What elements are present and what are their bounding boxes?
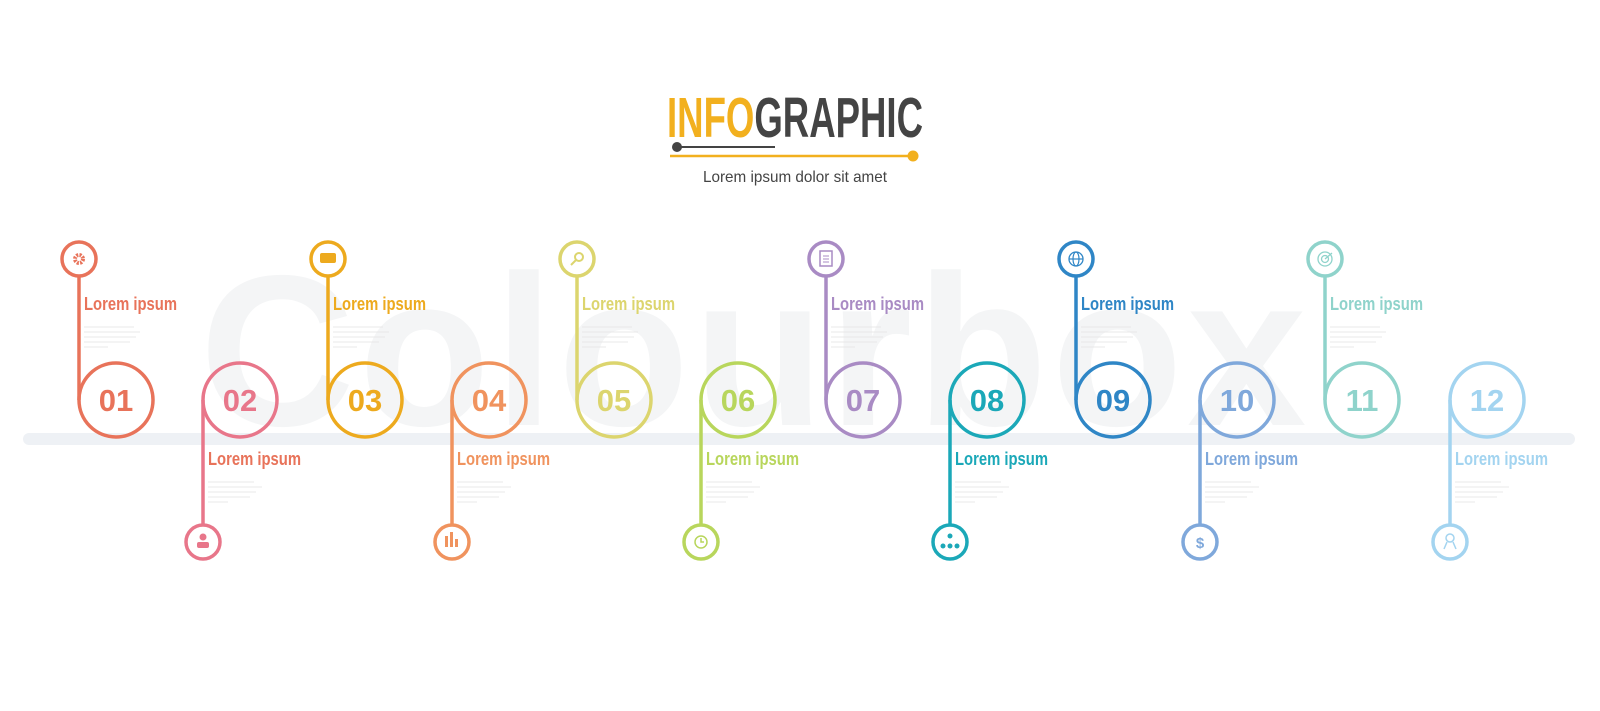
step 12 — [1433, 363, 1548, 559]
step 08: Lorem ipsum — [955, 449, 1048, 469]
title: INFOGRAPHIC — [667, 86, 923, 150]
step 02: Lorem ipsum — [208, 449, 301, 469]
step 05: Lorem ipsum — [582, 294, 675, 314]
timeline bar — [23, 433, 1575, 445]
step 08 — [933, 363, 1048, 559]
step 05 — [560, 242, 675, 437]
step 03: 03 — [348, 383, 382, 418]
step 10 — [1183, 363, 1298, 559]
step 06: Lorem ipsum — [706, 449, 799, 469]
step 09: 09 — [1096, 383, 1130, 418]
step 10: Lorem ipsum — [1205, 449, 1298, 469]
step 01: Lorem ipsum — [84, 294, 177, 314]
step 01: 01 — [99, 383, 133, 418]
step 02: 02 — [223, 383, 257, 418]
step 07: Lorem ipsum — [831, 294, 924, 314]
step 08: 08 — [970, 383, 1004, 418]
step 10: 10 — [1220, 383, 1254, 418]
step 11 — [1308, 242, 1423, 437]
subtitle: Lorem ipsum dolor sit amet — [703, 169, 888, 186]
step 11: Lorem ipsum — [1330, 294, 1423, 314]
step 03 — [311, 242, 426, 437]
watermark: Colourbox — [200, 230, 1310, 471]
step 12: Lorem ipsum — [1455, 449, 1548, 469]
step 03: Lorem ipsum — [333, 294, 426, 314]
step 10: $ — [1196, 535, 1205, 552]
step 04: 04 — [472, 383, 507, 418]
step 06 — [684, 363, 799, 559]
title — [667, 86, 923, 162]
step 07: 07 — [846, 383, 880, 418]
step 02 — [186, 363, 301, 559]
step 12: 12 — [1470, 383, 1504, 418]
step 04 — [435, 363, 550, 559]
step 04: Lorem ipsum — [457, 449, 550, 469]
step 11: 11 — [1346, 383, 1378, 418]
step 06: 06 — [721, 383, 755, 418]
step 05: 05 — [597, 383, 631, 418]
step 09: Lorem ipsum — [1081, 294, 1174, 314]
step 09 — [1059, 242, 1174, 437]
step 07 — [809, 242, 924, 437]
step 01 — [62, 242, 177, 437]
